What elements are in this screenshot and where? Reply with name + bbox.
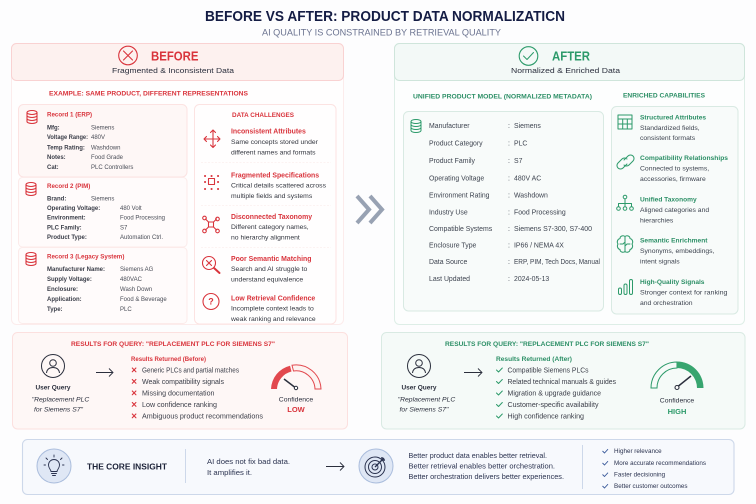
unified model card: :: [508, 259, 510, 266]
capability: high-quality signals: [618, 279, 728, 307]
title: BEFORE VS AFTER: PRODUCT DATA NORMALIZATICN: [205, 9, 565, 25]
unified model card: ERP, PIM, Tech Docs, Manual: [514, 259, 600, 266]
after header: [394, 44, 744, 80]
insight statement: [207, 457, 290, 477]
record 1 card: Mfg:: [47, 126, 60, 132]
challenge: low retrieval confidence: Low Retrieval Confidence: [231, 296, 315, 302]
unified model card: :: [508, 210, 510, 216]
user query after: [398, 354, 455, 414]
unified model card: 2024-05-13: [514, 276, 549, 283]
capability: semantic enrichment: Semantic Enrichment: [640, 238, 708, 244]
arrow: query to results: [464, 368, 482, 376]
before header: Fragmented & Inconsistent Data: [112, 66, 235, 75]
challenge: disconnected taxonomy: no hierarchy alignment: [231, 234, 300, 242]
record 2 card: [18, 178, 187, 247]
results list after: High confidence ranking: [508, 414, 584, 420]
outcomes checklist: [602, 448, 706, 490]
record 2 card: PLC Family:: [47, 226, 82, 232]
record 2 card: Record 2 (PIM): [47, 183, 90, 190]
user query after: User Query: [401, 384, 437, 392]
challenge: fragmented specifications: multiple fields and systems: [231, 193, 313, 200]
unified model card: Washdown: [514, 192, 548, 200]
capability: structured attributes: Standardized fields,: [640, 125, 700, 132]
arrow: query to results: [96, 368, 113, 376]
challenge: inconsistent attributes: Same concepts stored under: [231, 139, 319, 146]
capability: high-quality signals: and orchestration: [640, 300, 693, 307]
results list after: [496, 356, 616, 420]
unified model card: Last Updated: [429, 276, 470, 283]
panel: core insight: [22, 440, 734, 494]
unified model card: Siemens: [514, 123, 541, 130]
enriched heading: ENRICHED CAPABILITIES: [623, 92, 706, 100]
record 3 card: Manufacturer Name:: [47, 267, 105, 273]
record 2 card: Siemens: [91, 196, 114, 202]
insight chain text: Better orchestration delivers better experiences.: [408, 472, 564, 481]
unified model card: Environment Rating: [429, 192, 490, 200]
challenge: fragmented specifications: Fragmented Specifications: [231, 172, 319, 180]
panel: results after: [382, 332, 745, 429]
record 2 card: Brand:: [47, 196, 66, 202]
unified model card: [404, 112, 604, 311]
capability: high-quality signals: High-Quality Signals: [640, 279, 705, 286]
user query before: "Replacement PLC: [32, 396, 89, 404]
challenge: disconnected taxonomy: [203, 214, 312, 242]
capability: unified taxonomy: Unified Taxonomy: [640, 196, 697, 204]
before header: [12, 44, 344, 80]
arrow: before to after: [357, 196, 382, 223]
data challenges heading: DATA CHALLENGES: [232, 112, 295, 119]
icon: target: [359, 449, 393, 483]
example heading: EXAMPLE: SAME PRODUCT, DIFFERENT REPRESENTATIONS: [49, 90, 249, 98]
record 1 card: Voltage Range:: [47, 135, 88, 141]
challenge: poor semantic matching: Poor Semantic Matching: [231, 256, 311, 263]
unified model card: :: [508, 140, 510, 148]
after header: Normalized & Enriched Data: [511, 66, 621, 75]
unified model card: :: [508, 192, 510, 200]
results list before: Missing documentation: [142, 390, 215, 398]
challenge: fragmented specifications: Critical details scattered across: [231, 182, 327, 190]
record 1 card: Siemens: [91, 126, 114, 132]
record 1 card: PLC Controllers: [91, 165, 133, 171]
capability: semantic enrichment: [617, 236, 715, 266]
record 3 card: Record 3 (Legacy System): [47, 254, 124, 260]
core insight label: THE CORE INSIGHT: [87, 462, 167, 472]
unified model card: Enclosure Type: [429, 242, 477, 250]
record 1 card: Cat:: [47, 165, 59, 171]
record 3 card: Supply Voltage:: [47, 277, 92, 283]
results after heading: RESULTS FOR QUERY: "REPLACEMENT PLC FOR SIEMENS S7": [445, 341, 649, 348]
unified model card: PLC: [514, 140, 527, 148]
capability: structured attributes: [618, 114, 706, 142]
capability: semantic enrichment: intent signals: [640, 258, 680, 266]
capability: unified taxonomy: Aligned categories and: [640, 207, 709, 214]
results list after: Customer-specific availability: [508, 402, 599, 409]
confidence gauge low: LOW: [287, 405, 306, 414]
unified model card: :: [508, 226, 510, 233]
unified model heading: UNIFIED PRODUCT MODEL (NORMALIZED METADATA): [413, 94, 592, 100]
unified model card: :: [508, 158, 510, 165]
unified model card: :: [508, 176, 510, 182]
record 3 card: Type:: [47, 307, 63, 313]
record 2 card: Automation Ctrl.: [120, 235, 163, 241]
enriched capabilities card: [612, 106, 738, 314]
challenge: inconsistent attributes: different names and formats: [231, 150, 316, 156]
capability: unified taxonomy: [617, 195, 709, 224]
capability: structured attributes: Structured Attributes: [640, 114, 706, 122]
capability: unified taxonomy: hierarchies: [640, 218, 674, 224]
unified model card: Data Source: [429, 259, 467, 266]
unified model card: Food Processing: [514, 210, 566, 216]
record 1 card: [18, 104, 187, 177]
record 1 card: Food Grade: [91, 155, 124, 161]
record 3 card: Wash Down: [120, 287, 152, 293]
challenge: fragmented specifications: [205, 172, 327, 200]
outcomes checklist: Faster decisioning: [614, 472, 666, 478]
challenge: low retrieval confidence: ?: [208, 296, 214, 306]
unified model card: Operating Voltage: [429, 176, 484, 182]
unified model card: Product Family: [429, 158, 476, 165]
record 3 card: Enclosure:: [47, 287, 78, 293]
record 2 card: Product Type:: [47, 235, 87, 241]
user query before: for Siemens S7": [34, 406, 84, 414]
user query before: User Query: [35, 384, 71, 392]
outcomes checklist: Higher relevance: [614, 448, 662, 455]
record 3 card: Siemens AG: [120, 267, 154, 273]
record 3 card: [18, 248, 187, 324]
unified model card: IP66 / NEMA 4X: [514, 242, 564, 250]
record 3 card: Application:: [47, 297, 82, 303]
unified model card: Manufacturer: [429, 123, 470, 130]
results list before: [131, 356, 264, 420]
insight statement: AI does not fix bad data.: [207, 457, 290, 466]
record 1 card: Washdown: [91, 146, 120, 152]
user query before: [32, 354, 89, 414]
record 1 card: Record 1 (ERP): [47, 112, 92, 118]
capability: compatibility relationships: Connected to systems,: [640, 166, 709, 172]
arrow: insight to target: [326, 462, 344, 470]
unified model card: Product Category: [429, 140, 483, 148]
record 3 card: PLC: [120, 307, 132, 313]
unified model card: :: [508, 123, 510, 130]
confidence gauge high: HIGH: [668, 407, 686, 416]
capability: compatibility relationships: [617, 155, 728, 183]
user query after: for Siemens S7": [400, 406, 449, 414]
capability: semantic enrichment: Synonyms, embeddings,: [640, 248, 715, 255]
challenge: low retrieval confidence: weak ranking and relevance: [230, 316, 316, 323]
capability: structured attributes: consistent formats: [640, 135, 696, 142]
record 3 card: 480VAC: [120, 277, 143, 283]
panel: before: [12, 44, 344, 324]
capability: compatibility relationships: accessories, firmware: [640, 176, 706, 183]
results list after: Migration & upgrade guidance: [508, 390, 601, 398]
confidence gauge low: [271, 365, 321, 414]
results list after: Related technical manuals & guides: [508, 379, 616, 386]
unified model card: Siemens S7-300, S7-400: [514, 226, 592, 233]
results list before: Results Returned (Before): [131, 356, 206, 363]
unified model card: :: [508, 242, 510, 250]
challenge: poor semantic matching: understand equivalence: [231, 276, 303, 284]
data challenges card: [194, 104, 336, 324]
capability: compatibility relationships: Compatibility Relationships: [640, 155, 728, 162]
unified model card: Industry Use: [429, 210, 468, 216]
unified model card: :: [508, 276, 510, 283]
results list after: Results Returned (After): [496, 356, 572, 363]
results list before: Generic PLCs and partial matches: [142, 368, 239, 374]
challenge: inconsistent attributes: [204, 128, 319, 156]
insight chain text: Better retrieval enables better orchestration.: [408, 462, 555, 470]
record 2 card: 480 Volt: [120, 206, 142, 212]
record 2 card: Food Processing: [120, 216, 165, 222]
panel: results before: [12, 332, 348, 429]
challenge: low retrieval confidence: Incomplete context leads to: [231, 306, 314, 312]
record 2 card: Operating Voltage:: [47, 206, 100, 212]
outcomes checklist: More accurate recommendations: [614, 460, 706, 467]
unified model card: Compatible Systems: [429, 226, 493, 233]
record 1 card: Temp Rating:: [47, 146, 85, 152]
challenge: disconnected taxonomy: Disconnected Taxonomy: [231, 214, 312, 221]
confidence gauge high: Confidence: [660, 398, 694, 404]
capability: high-quality signals: Stronger context for ranking: [640, 290, 728, 296]
insight statement: It amplifies it.: [207, 468, 252, 477]
after header: AFTER: [552, 50, 590, 64]
results list after: Compatible Siemens PLCs: [508, 368, 589, 374]
challenge: disconnected taxonomy: Different category names,: [231, 224, 309, 231]
user query after: "Replacement PLC: [398, 396, 455, 404]
record 1 card: Notes:: [47, 155, 66, 161]
panel: after: [394, 44, 744, 324]
challenge: poor semantic matching: Search and AI struggle to: [231, 266, 308, 273]
record 2 card: S7: [120, 226, 128, 232]
challenge: inconsistent attributes: Inconsistent Attributes: [231, 128, 306, 136]
challenge: low retrieval confidence: [203, 294, 316, 323]
confidence gauge high: [651, 362, 704, 416]
record 2 card: Environment:: [47, 216, 86, 222]
confidence gauge low: Confidence: [279, 396, 313, 404]
challenge: poor semantic matching: [202, 256, 311, 284]
icon: light bulb: [37, 449, 71, 483]
insight chain text: [408, 451, 564, 481]
insight chain text: Better product data enables better retrieval.: [408, 451, 547, 460]
subtitle: AI QUALITY IS CONSTRAINED BY RETRIEVAL QUALITY: [262, 28, 502, 38]
outcomes checklist: Better customer outcomes: [614, 483, 688, 490]
results list before: Low confidence ranking: [142, 402, 217, 409]
results before heading: RESULTS FOR QUERY: "REPLACEMENT PLC FOR SIEMENS S7": [71, 341, 275, 348]
results list before: Weak compatibility signals: [142, 379, 224, 386]
unified model card: 480V AC: [514, 176, 541, 182]
unified model card: S7: [514, 158, 523, 165]
before header: BEFORE: [151, 50, 198, 64]
record 1 card: 480V: [91, 135, 105, 141]
results list before: Ambiguous product recommendations: [142, 414, 264, 420]
record 3 card: Food & Beverage: [120, 297, 167, 303]
